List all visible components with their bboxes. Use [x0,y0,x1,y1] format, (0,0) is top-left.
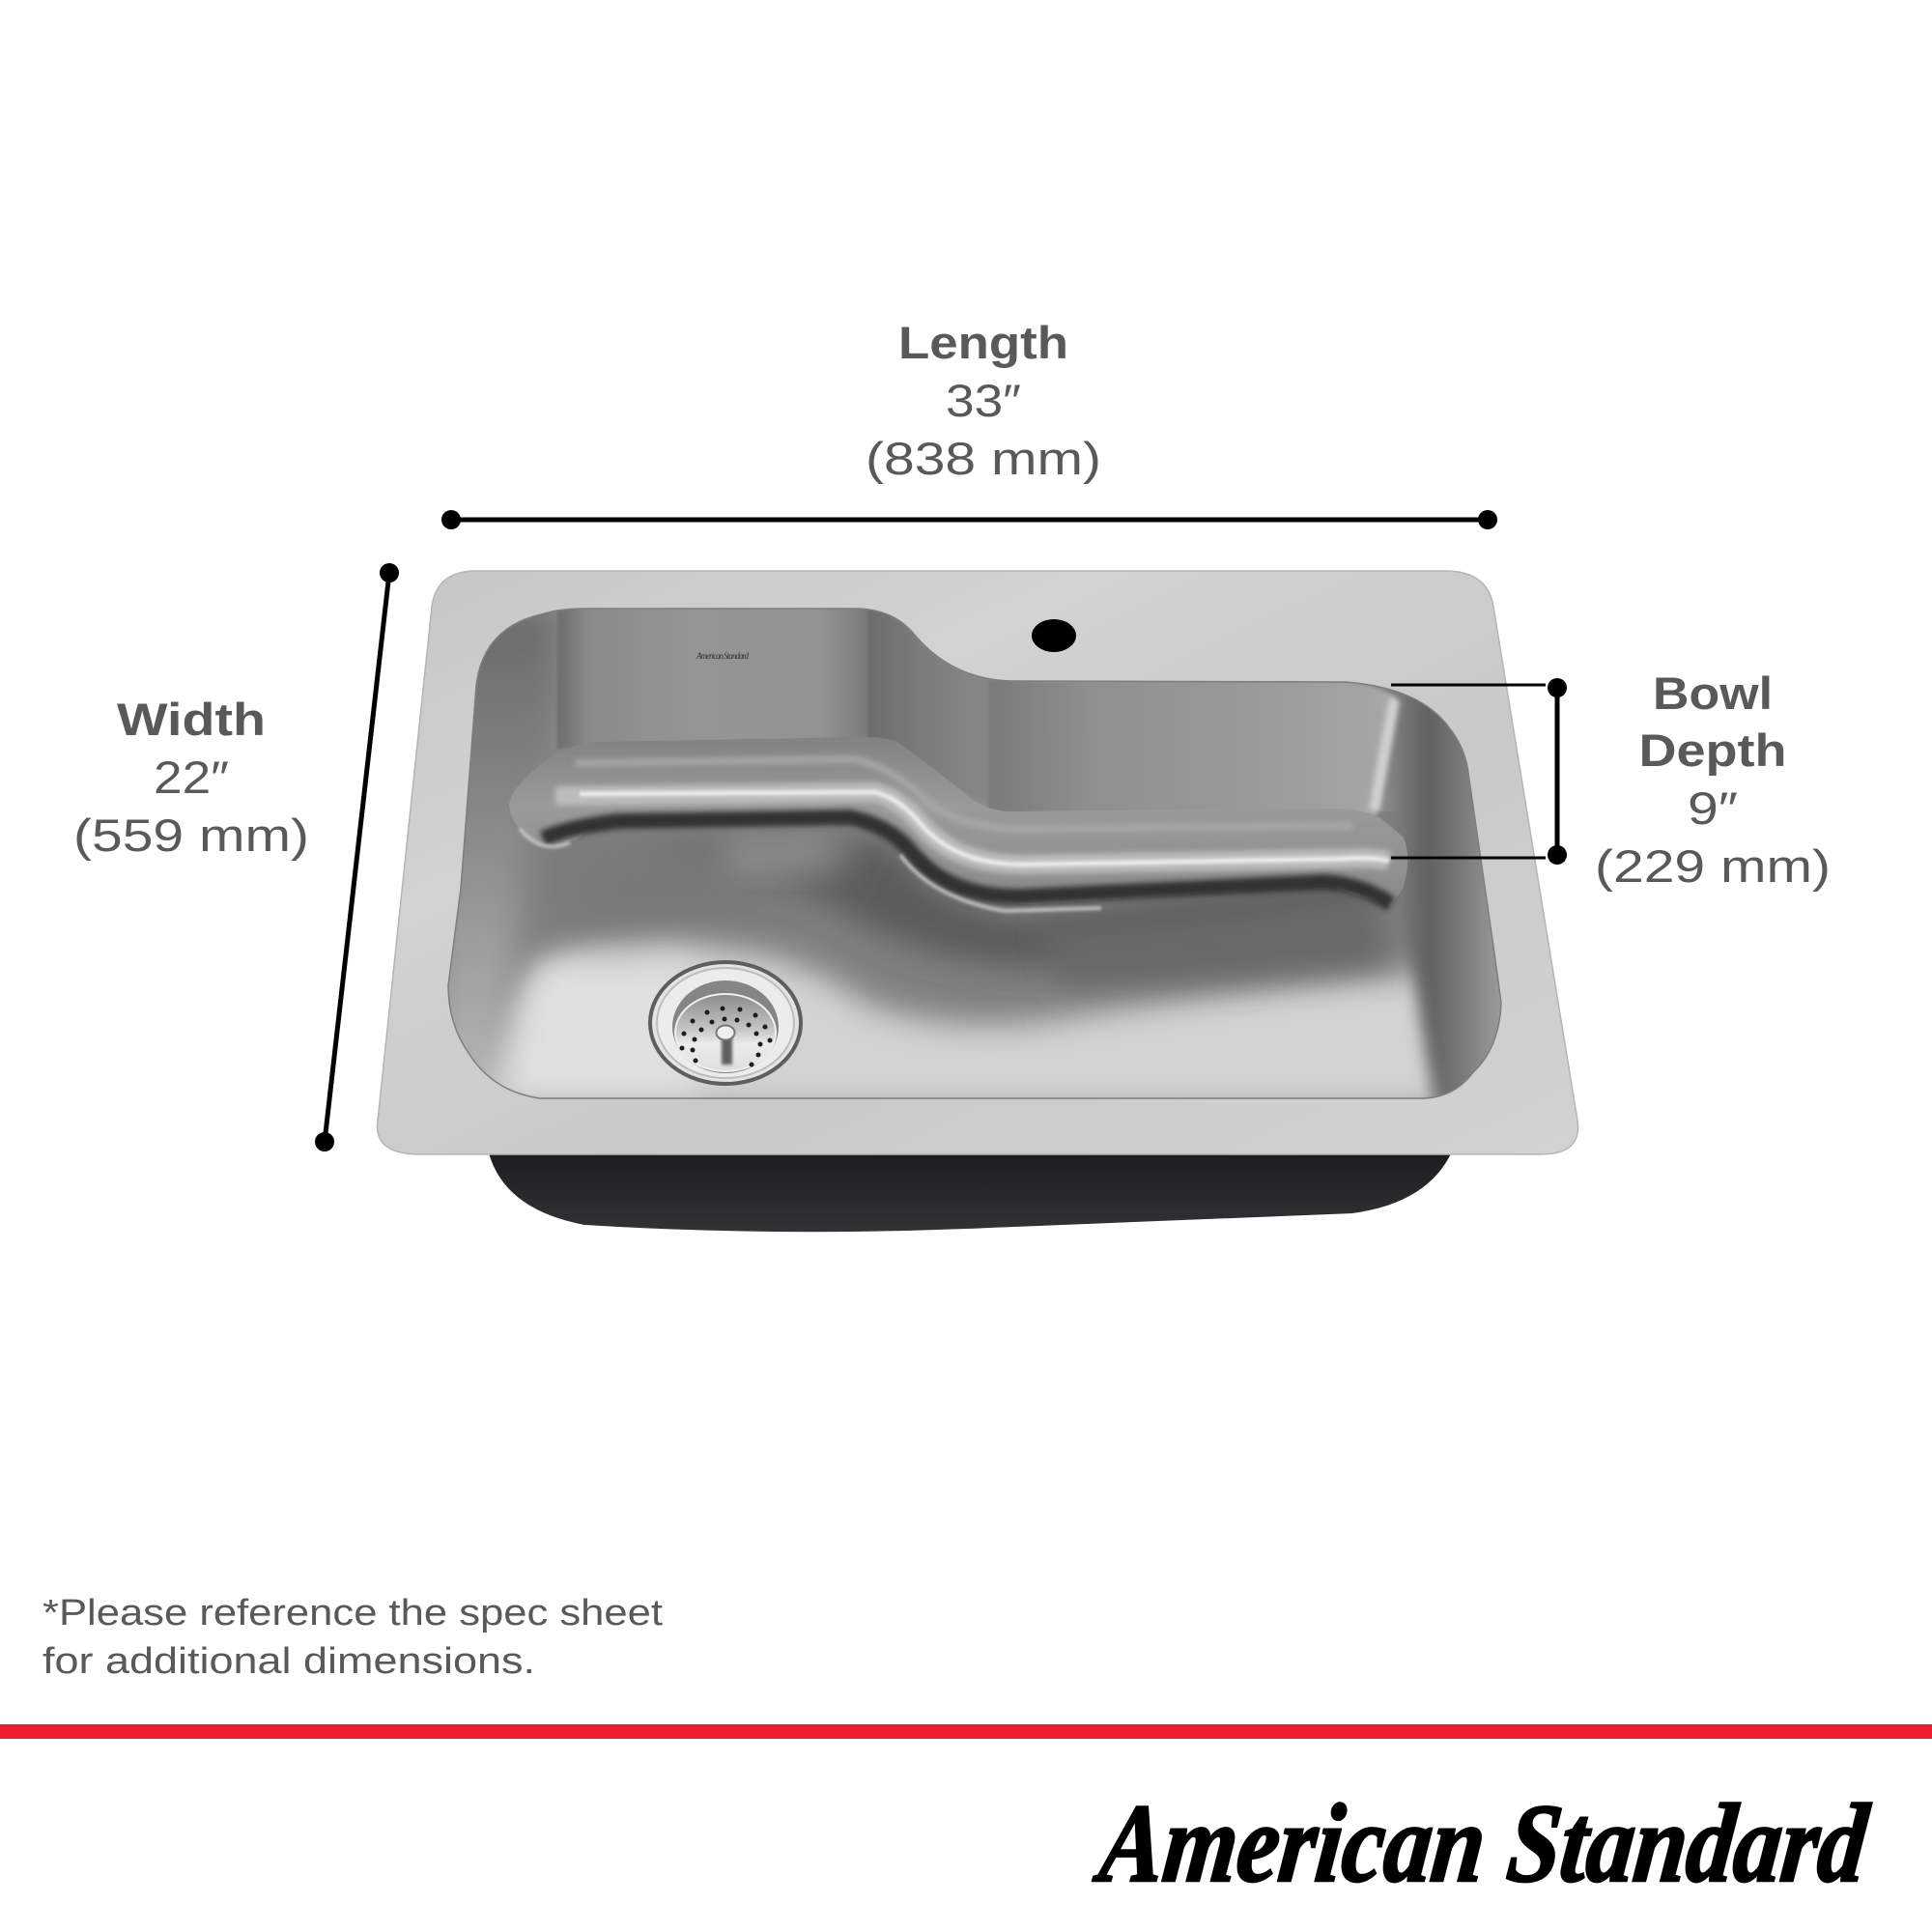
footnote: for additional dimensions. [43,1641,535,1682]
bowl [435,599,1521,1111]
right wall light streak [1369,697,1400,811]
width label: 22″ [154,752,229,803]
right back wall [988,680,1396,816]
bowl depth label: (229 mm) [1595,840,1831,892]
ledge lower rim [520,829,1101,911]
length label: 33″ [946,375,1021,426]
faucet hole [1032,619,1076,652]
ledge highlight [580,792,1389,865]
ledge shadow [543,817,1391,904]
width label [73,694,309,861]
width label: Width [117,694,266,745]
right side wall [1389,691,1498,1097]
bowl depth label [1595,668,1831,892]
length label: (838 mm) [866,433,1101,484]
bowl rim outline [448,609,1501,1098]
length label: Length [898,317,1068,368]
footnote: *Please reference the spec sheet [43,1593,664,1634]
width dimension line [315,563,399,1151]
left back wall [557,607,867,749]
bowl depth dimension line [1391,678,1567,865]
bowl depth label: 9″ [1688,782,1738,834]
red divider bar [0,1724,1932,1739]
length dimension line [441,510,1497,529]
drain strainer [650,962,801,1084]
sink underside [488,1150,1453,1232]
width label: (559 mm) [73,810,309,861]
sink flange [378,571,1578,1154]
bowl depth label: Depth [1638,724,1787,776]
sink illustration [378,571,1578,1232]
left side wall [448,612,557,1086]
wall curve connector [866,611,966,790]
strainer stem [717,1026,734,1065]
length label [866,317,1101,484]
ledge upper band [575,759,1352,829]
ledge highlight glow [555,792,1389,865]
footnote [43,1593,664,1682]
bowl depth label: Bowl [1653,668,1773,719]
bowl brand mark: American Standard [696,651,750,661]
strainer holes [680,1007,773,1066]
ledge [509,737,1407,911]
bowl floor shading [483,811,1441,1097]
